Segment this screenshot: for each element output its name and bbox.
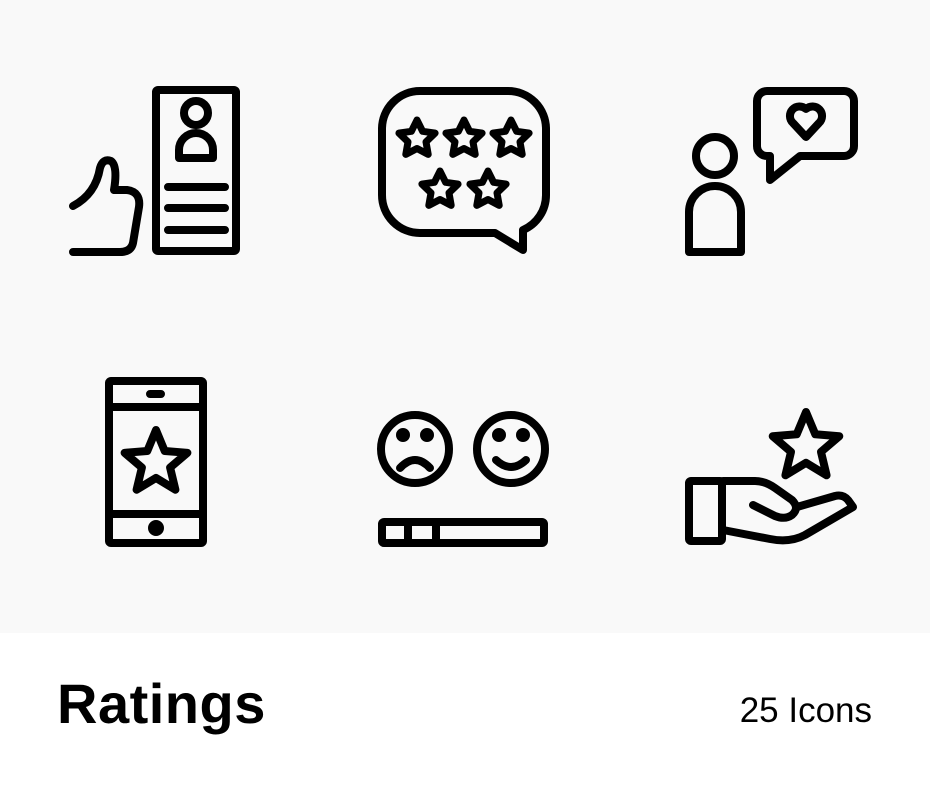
icon count: 25 Icons (740, 691, 872, 730)
icon: person with heart bubble (689, 91, 854, 252)
icon: speech bubble with stars (382, 91, 546, 250)
icon: hand holding star (689, 412, 853, 541)
icon: thumbs up with profile card (73, 90, 236, 252)
title: Ratings (57, 672, 266, 735)
icon: phone with star (109, 381, 203, 543)
icon: sad and happy faces with rating bar (381, 415, 545, 543)
